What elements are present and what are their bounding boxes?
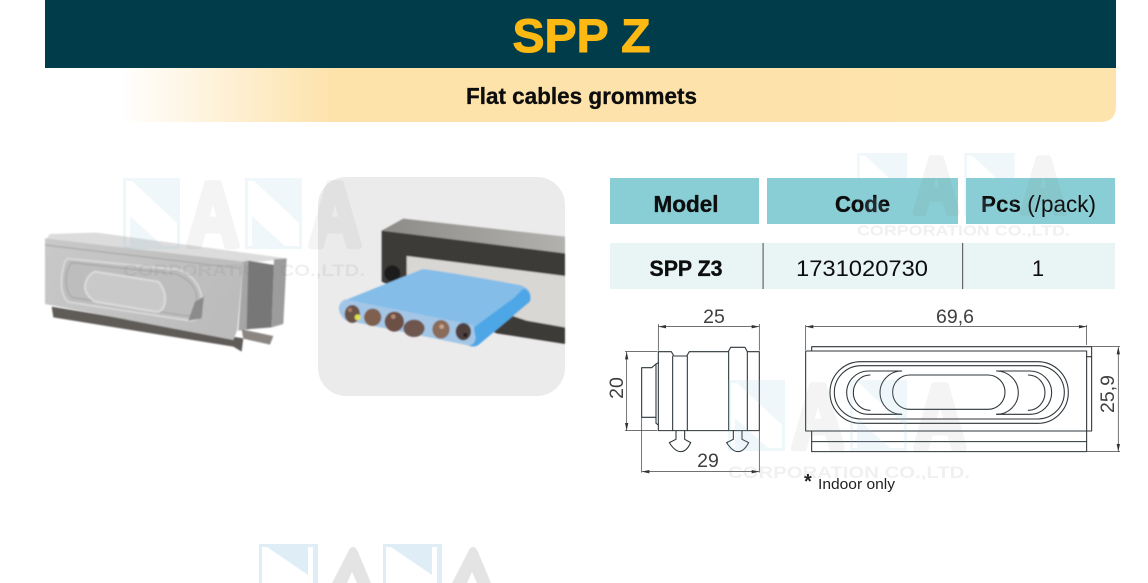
watermark: top right: CORPORATION CO.,LTD.: [857, 223, 1070, 240]
watermark: over drawing: A: [914, 368, 966, 468]
row divider right: [962, 243, 963, 289]
watermark: bottom, cropped by the page edge: [259, 544, 491, 583]
dimension: 20: 20: [606, 377, 628, 399]
watermark: over drawing: [728, 368, 970, 482]
technical drawing: front view: [806, 325, 1120, 452]
watermark: top left: A: [187, 166, 239, 266]
watermark: top right: A: [1021, 141, 1066, 230]
dimension: 25,9: 25,9: [1097, 375, 1119, 413]
watermark: over drawing: A: [792, 368, 844, 468]
header bar: [45, 0, 1116, 68]
watermark: top left: A: [309, 166, 361, 266]
watermark: top right: [857, 141, 1070, 240]
watermark: top right: A: [913, 141, 959, 230]
technical drawing: side view: [625, 324, 759, 473]
footnote: *: [804, 471, 812, 493]
table header: code: [767, 178, 958, 224]
title: SPP Z: [512, 9, 650, 62]
dimension: 25: 25: [703, 306, 725, 328]
cell: model value: SPP Z3: [650, 256, 722, 281]
footnote: Indoor only: [818, 477, 896, 493]
cell: code value: 1731020730: [796, 256, 928, 281]
subtitle: Flat cables grommets: [466, 83, 697, 109]
cell: pieces value: 1: [1032, 256, 1044, 281]
installed flat cable photo: [339, 219, 565, 347]
product photo: grommet: [45, 233, 287, 352]
dimension: 69,6: 69,6: [936, 306, 974, 328]
table data row background: [610, 243, 1115, 289]
subtitle band: [45, 68, 1116, 122]
header label: Model: Model: [654, 191, 718, 217]
dimension: 29: 29: [697, 450, 719, 472]
photo panel: cable in grommet: [318, 177, 565, 396]
watermark: over drawing: CORPORATION CO.,LTD.: [728, 463, 970, 482]
table header: pieces per pack: [966, 178, 1115, 224]
row divider left: [762, 243, 764, 289]
header label: Pcs (/pack): Pcs (/pack): [981, 191, 1096, 217]
watermark: top left: CORPORATION CO.,LTD.: [123, 261, 365, 280]
header label: Code: Code: [835, 191, 890, 217]
table header: model: [610, 178, 759, 224]
watermark: top left: [123, 166, 365, 280]
